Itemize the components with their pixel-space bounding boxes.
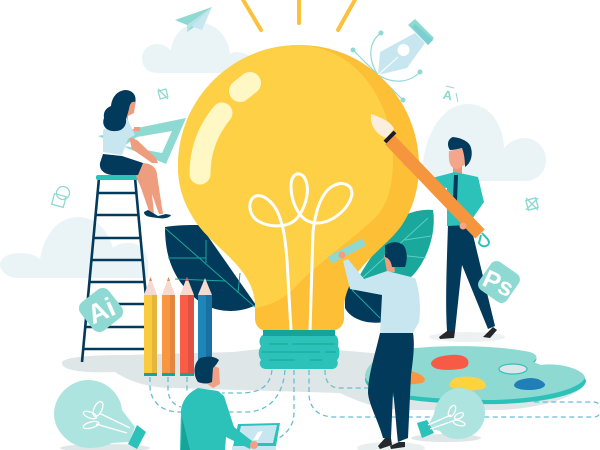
- paint hole: [499, 364, 527, 374]
- face: [206, 365, 220, 388]
- shirt: [343, 259, 420, 334]
- small bulb left: [54, 380, 150, 450]
- highlight: short: [240, 83, 250, 91]
- laptop: [232, 423, 280, 450]
- hand on brush: [460, 222, 466, 230]
- ladder: [82, 175, 152, 362]
- trousers: [446, 224, 495, 331]
- pencil: blue: [198, 278, 212, 373]
- leaf: right teal: [356, 210, 434, 282]
- badge: Ai: [76, 285, 127, 336]
- pencil: red: [180, 277, 194, 376]
- bulb glass light: [178, 45, 393, 308]
- neck: [453, 165, 462, 175]
- blouse: [103, 118, 135, 155]
- hand: [338, 252, 346, 258]
- hair: [385, 242, 407, 267]
- ruler: [330, 242, 364, 260]
- man with laptop: [180, 357, 280, 450]
- hair: [194, 357, 219, 384]
- pencil: orange: [162, 277, 175, 376]
- neck: [384, 255, 395, 272]
- cloud: right: [422, 104, 546, 181]
- icon: text tool: A: [442, 87, 454, 103]
- brush bristles: [371, 114, 394, 138]
- face: [120, 97, 136, 122]
- woman on ladder: [98, 90, 186, 218]
- highlight: long: [200, 113, 222, 174]
- man with ruler: [330, 242, 425, 450]
- badge: Ai: Ai: [83, 292, 120, 330]
- icon: crop tool right: [526, 198, 538, 210]
- shoes: [378, 438, 405, 449]
- palette: [365, 346, 586, 404]
- icon: shapes: [52, 186, 70, 207]
- ground shadow: [62, 349, 586, 410]
- jersey shade: [181, 417, 190, 450]
- brush ferrule: [385, 132, 395, 142]
- hanging loop: [479, 233, 489, 246]
- light rays: [242, 0, 356, 30]
- hand: [250, 441, 258, 449]
- shadow: [429, 332, 505, 342]
- brush handle: [390, 140, 480, 234]
- badge: Ps: [474, 258, 523, 307]
- cloud: top: [142, 23, 255, 73]
- paint: yellow: [449, 377, 486, 391]
- badge: Ps: Ps: [478, 265, 518, 303]
- paint: blue: [514, 378, 545, 390]
- bulb base: [259, 330, 339, 369]
- filament: [250, 174, 352, 331]
- bulb glass shadow: [178, 45, 419, 331]
- icon: paper plane: [175, 7, 212, 32]
- paint: orange: [390, 370, 425, 384]
- icon: text tool: [442, 86, 458, 103]
- legs: [136, 163, 163, 214]
- shadow: [357, 442, 425, 450]
- icon: pen tool: [350, 19, 434, 102]
- pencil: yellow: [144, 277, 157, 376]
- shoes: [439, 327, 497, 339]
- shirt: [408, 166, 484, 226]
- hand: [402, 160, 410, 166]
- paint: red: [431, 355, 468, 370]
- hair: [103, 90, 136, 131]
- hair: [448, 137, 472, 167]
- light bulb: [178, 45, 419, 331]
- skirt: [100, 154, 143, 175]
- pencils: [144, 277, 212, 376]
- trousers: [368, 333, 414, 442]
- cloud: left: [0, 217, 148, 278]
- shoes: [144, 210, 171, 218]
- connection lines: [150, 370, 600, 438]
- jersey: [180, 388, 252, 450]
- leaf: lower navy: [345, 280, 385, 323]
- hand on ruler: [134, 127, 140, 131]
- tie: [453, 175, 458, 202]
- man with paintbrush: [371, 114, 505, 342]
- triangle ruler: [98, 118, 186, 164]
- face: [449, 148, 466, 169]
- arm: [129, 137, 158, 163]
- icon: crop tool left: [158, 89, 168, 99]
- leaf: left navy: [165, 225, 256, 311]
- small bulb right: [411, 388, 485, 442]
